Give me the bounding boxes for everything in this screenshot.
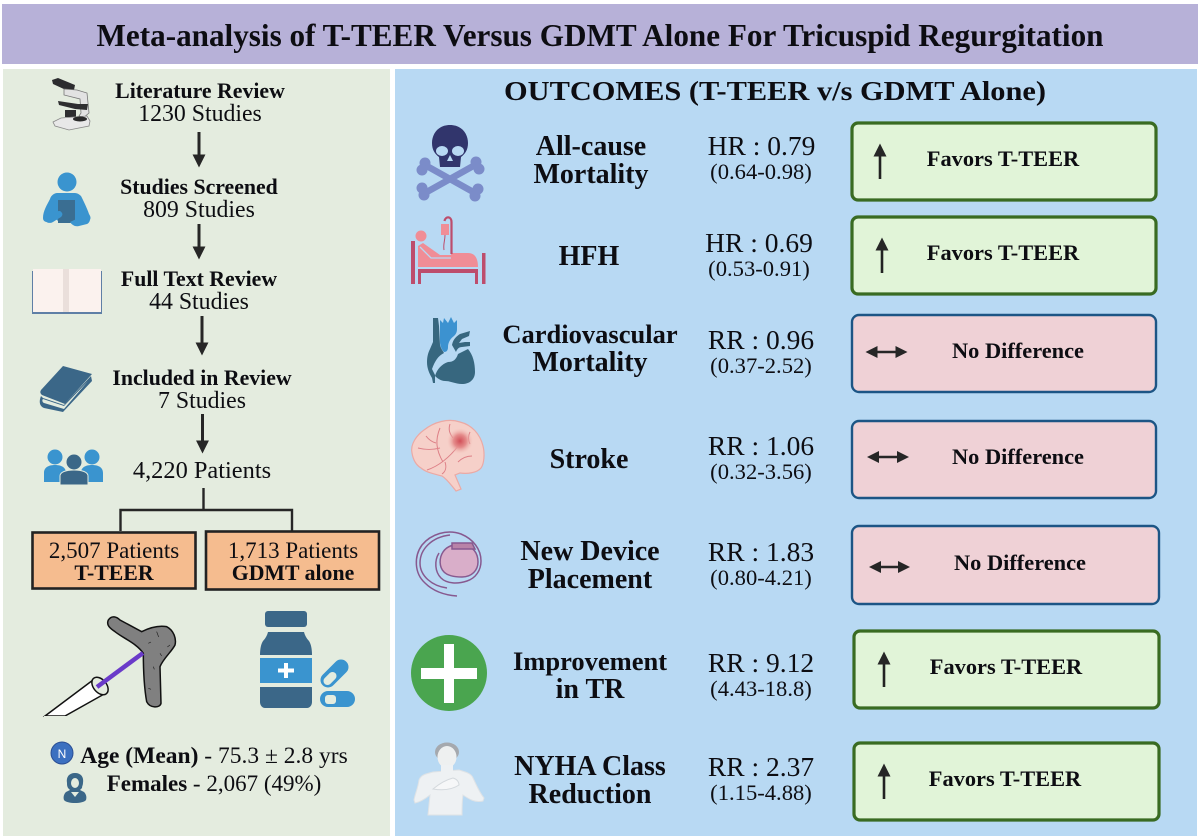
box: T-TEER arm: T-TEER: [74, 561, 154, 585]
icon: pacemaker: [416, 532, 481, 596]
icon: medication bottle and pills: [260, 611, 355, 708]
verdict: favors: [852, 123, 1156, 200]
row: HFH: [411, 217, 1156, 294]
row: NYHA class reduction: [414, 742, 1159, 820]
text: included in review: 7 Studies: [158, 388, 246, 414]
panel: study selection flow: [3, 69, 390, 836]
statistic: RR : 9.12: [708, 647, 814, 678]
text: full text review: 44 Studies: [149, 289, 249, 315]
statistic: [708, 647, 814, 701]
arrow: included to patients: [201, 414, 204, 447]
verdict: favors: Favors T-TEER: [927, 240, 1080, 265]
verdict: no difference: No Difference: [952, 444, 1084, 469]
text: mean age: Age (Mean) - 75.3 ± 2.8 yrs: [80, 743, 348, 769]
statistic: RR : 1.06: [708, 430, 814, 461]
icon: skull and crossbones: [416, 125, 484, 202]
text: literature review: Literature Review: [115, 79, 285, 103]
text: studies screened: [120, 175, 278, 223]
verdict: no difference: No Difference: [952, 338, 1084, 363]
box: T-TEER arm: 2,507 Patients: [49, 538, 179, 563]
statistic: [708, 430, 814, 484]
connector: split into arms: [120, 488, 292, 531]
panel: outcomes: [395, 69, 1197, 836]
statistic: (0.64-0.98): [710, 159, 812, 184]
label: Cardiovascular: [502, 319, 678, 349]
verdict: no difference: No Difference: [954, 550, 1086, 575]
text: total patients: 4,220 Patients: [133, 457, 271, 484]
label: NYHA Class: [514, 751, 666, 782]
heading: outcomes: OUTCOMES (T-TEER v/s GDMT Alone): [504, 75, 1046, 106]
box: GDMT arm: [206, 532, 379, 590]
statistic: (0.32-3.56): [710, 459, 812, 484]
label line 2: Mortality: [533, 159, 649, 190]
title banner: Meta-analysis of T-TEER Versus GDMT Alone For Tricuspid Regurgitation: [96, 18, 1104, 53]
icon: green plus: [411, 635, 487, 711]
text: females: Females - 2,067 (49%): [107, 771, 321, 796]
row: improvement in TR: [411, 631, 1159, 711]
verdict: favors: Favors T-TEER: [927, 146, 1080, 171]
icon: person reading: [43, 172, 90, 226]
verdict: favors: Favors T-TEER: [929, 766, 1082, 791]
label: All-cause: [536, 131, 646, 162]
label: Improvement: [513, 646, 667, 676]
verdict: no difference: [852, 315, 1156, 392]
verdict: favors: [854, 743, 1159, 820]
statistic: RR : 0.96: [708, 324, 814, 355]
statistic: (1.15-4.88): [710, 780, 812, 805]
text: literature review: [115, 79, 285, 127]
arrow: review to screened: [198, 132, 200, 161]
icon: person with hands on chest: [414, 742, 484, 815]
row: new device placement: [416, 526, 1159, 604]
verdict: favors: [852, 217, 1156, 294]
text: included in review: [112, 366, 292, 414]
statistic: [708, 324, 814, 378]
verdict: favors: Favors T-TEER: [930, 654, 1083, 679]
row: all-cause mortality: [416, 123, 1156, 202]
statistic: (4.43-18.8): [710, 676, 812, 701]
text: mean age: N: [58, 747, 66, 761]
statistic: (0.53-0.91): [708, 256, 810, 281]
icon: heart: [427, 317, 475, 384]
text: full text review: [121, 267, 277, 315]
text: included in review: Included in Review: [112, 366, 292, 390]
label line 2: Reduction: [529, 779, 652, 810]
box: GDMT arm: 1,713 Patients: [228, 538, 358, 563]
box: GDMT arm: GDMT alone: [232, 561, 355, 585]
icon: microscope: [52, 78, 90, 130]
label: Stroke: [550, 444, 628, 475]
statistic: RR : 2.37: [708, 751, 814, 782]
icon: patient group: [44, 450, 103, 485]
icon: closed book: [40, 366, 92, 412]
label line 2: Mortality: [532, 347, 648, 378]
title banner: [2, 4, 1198, 64]
verdict: no difference: [852, 526, 1159, 604]
box: T-TEER arm: [32, 532, 196, 588]
icon: brain: [412, 420, 484, 491]
icon: hospital bed: [411, 217, 486, 284]
text: females: [64, 771, 321, 803]
arrow: full text to included: [200, 316, 204, 349]
arrow: screened to full text: [198, 224, 200, 253]
statistic: [705, 227, 813, 281]
statistic: HR : 0.69: [705, 227, 813, 258]
verdict: no difference: [852, 421, 1156, 498]
statistic: RR : 1.83: [708, 536, 814, 567]
row: cardiovascular mortality: [427, 315, 1156, 392]
statistic: [708, 130, 815, 184]
label line 2: Placement: [528, 564, 653, 595]
label: HFH: [559, 241, 620, 272]
statistic: (0.80-4.21): [710, 565, 812, 590]
statistic: HR : 0.79: [708, 130, 815, 161]
icon: open book: [32, 269, 102, 314]
text: studies screened: Studies Screened: [120, 175, 278, 199]
icon: tricuspid clip catheter: [44, 617, 175, 720]
statistic: [708, 751, 814, 805]
text: full text review: Full Text Review: [121, 267, 277, 291]
label line 2: in TR: [556, 674, 625, 705]
statistic: (0.37-2.52): [710, 353, 812, 378]
verdict: favors: [854, 631, 1159, 708]
statistic: [708, 536, 814, 590]
label: New Device: [520, 536, 660, 567]
text: literature review: 1230 Studies: [138, 101, 262, 127]
row: stroke: [412, 420, 1156, 498]
text: studies screened: 809 Studies: [143, 197, 255, 223]
